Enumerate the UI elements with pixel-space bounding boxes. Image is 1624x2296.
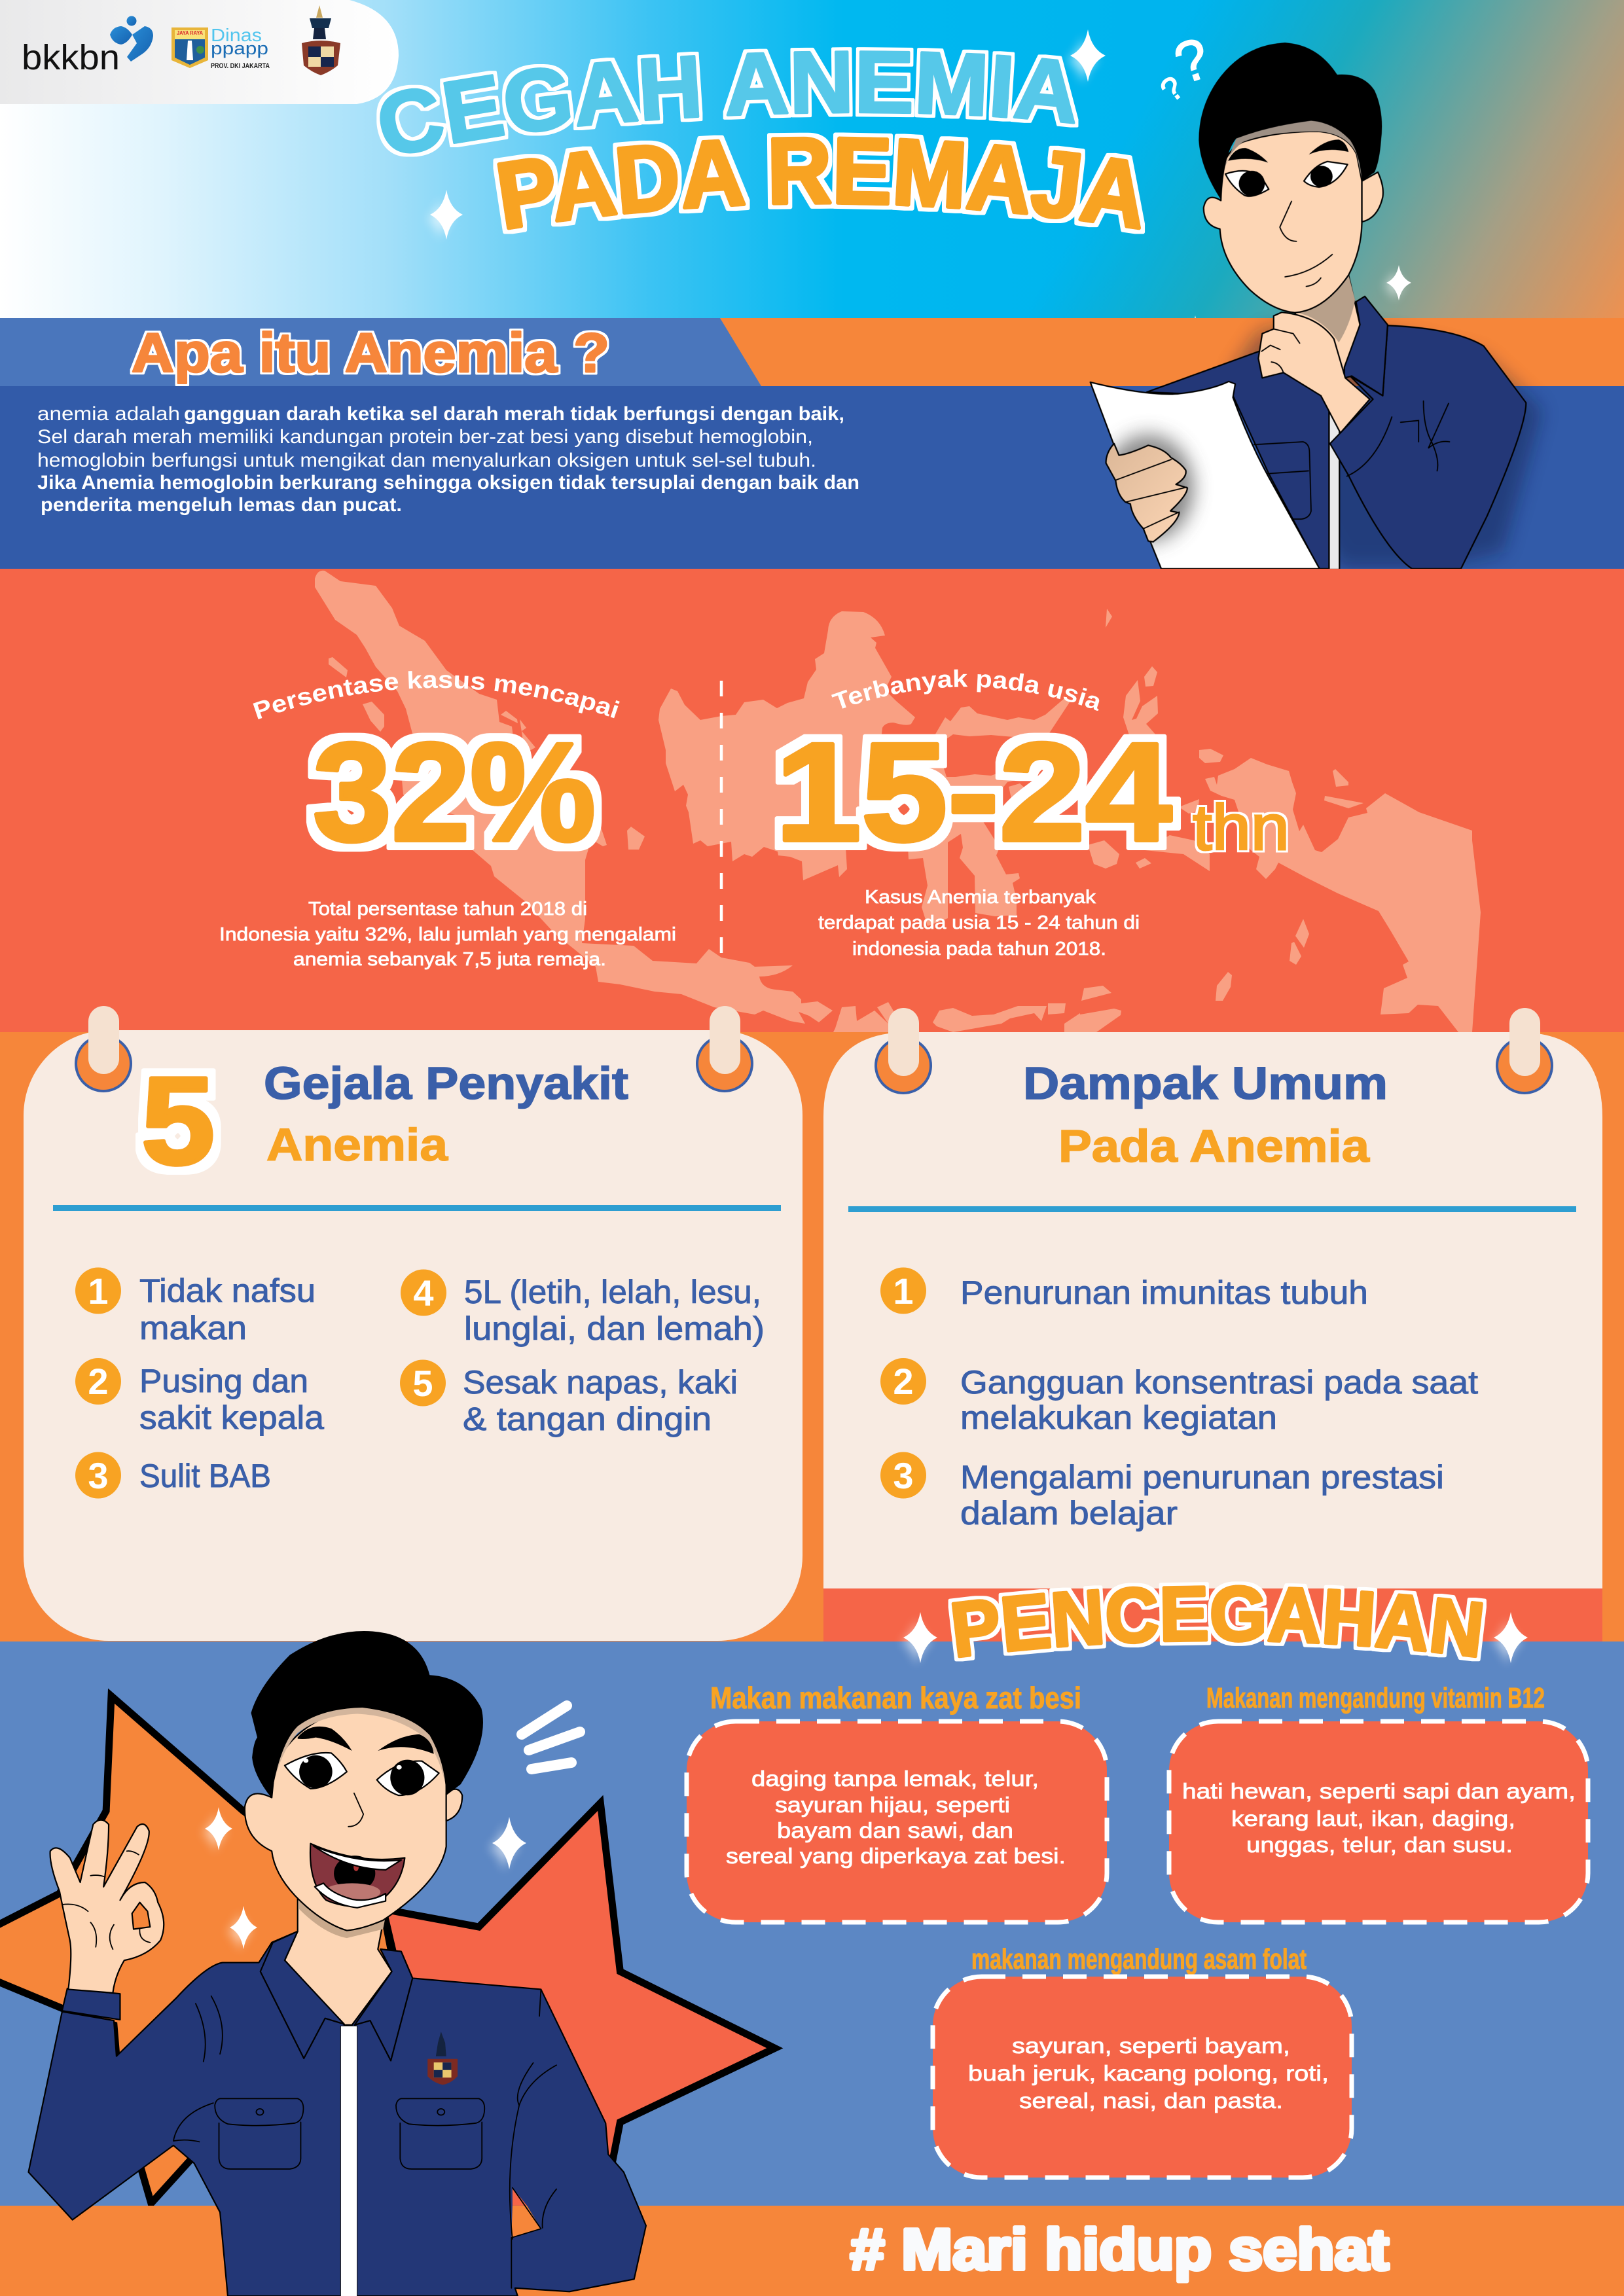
neck — [1295, 275, 1360, 374]
sparkles: around student — [202, 1807, 526, 1951]
panel: vitamin b12: hati hewan, seperti sapi dan ayam, — [1182, 1779, 1576, 1803]
heading: Anemia — [266, 1119, 448, 1170]
text block: definition of anemia: anemia adalah — [37, 403, 180, 425]
logo: bkkbn: bkkbn — [22, 38, 120, 77]
list item 2: Pusing dan — [139, 1363, 308, 1399]
text block: definition of anemia: penderita mengeluh lemas dan pucat. — [41, 494, 402, 516]
panel: gejala penyakit — [24, 1006, 803, 1641]
face — [245, 1704, 446, 1931]
panel: zat besi: sereal yang diperkaya zat besi. — [726, 1844, 1066, 1868]
panel: vitamin b12 — [1169, 1682, 1588, 1922]
text block: age description — [818, 887, 1140, 960]
arm gap — [513, 2188, 527, 2206]
panel: asam folat: buah jeruk, kacang polong, roti, — [968, 2061, 1329, 2085]
panel: zat besi — [687, 1681, 1107, 1922]
eyebrows — [298, 1727, 434, 1754]
text block: definition of anemia: hemoglobin berfungsi untuk mengikat dan menyalurkan oksigen untuk sel-sel tubuh. — [37, 450, 816, 471]
text block: definition of anemia: Sel darah merah memiliki kandungan protein ber-zat besi yang disebut hemoglobin, — [37, 426, 813, 448]
crest badge — [427, 2032, 458, 2085]
illustration: ok-gesture student — [28, 1631, 646, 2296]
text block: definition of anemia — [37, 403, 859, 516]
text block: 32 percent description: Indonesia yaitu 32%, lalu jumlah yang mengalami — [219, 924, 676, 945]
jacket pocket — [1254, 442, 1311, 519]
shirt placket — [340, 2026, 357, 2296]
logo: crest — [302, 5, 340, 75]
big number 5: 5 — [141, 1052, 215, 1191]
cuff — [62, 1988, 120, 2020]
section: prevention background — [0, 1641, 1624, 2206]
heading — [1023, 1058, 1388, 1172]
section: cards background — [0, 1032, 1624, 1643]
eyes — [285, 1753, 347, 1789]
eyebrows — [1228, 139, 1348, 162]
heading — [264, 1058, 628, 1170]
text block: age description: indonesia pada tahun 2018. — [852, 939, 1106, 960]
binder ring left — [76, 1006, 131, 1091]
list item 2: melakukan kegiatan — [960, 1399, 1277, 1436]
panel: vitamin b12: kerang laut, ikan, daging, — [1231, 1806, 1515, 1831]
background star: coral — [383, 1803, 775, 2206]
list item 5 — [400, 1360, 738, 1437]
panel: asam folat: sereal, nasi, dan pasta. — [1019, 2089, 1283, 2113]
icon: excitement lines — [522, 1706, 580, 1769]
panel: zat besi: daging tanpa lemak, telur, — [751, 1767, 1039, 1791]
list item 1 — [880, 1267, 1368, 1314]
nose — [348, 1793, 363, 1827]
list item 2: Gangguan konsentrasi pada saat — [960, 1364, 1478, 1401]
hair shadow — [1221, 120, 1362, 179]
list item 1: Tidak nafsu — [139, 1272, 316, 1309]
illustration: thinking student — [1091, 43, 1542, 569]
text block: age description: Kasus Anemia terbanyak — [865, 887, 1096, 908]
binder ring left — [876, 1008, 931, 1093]
list item 1: Penurunan imunitas tubuh — [960, 1274, 1368, 1311]
logo: bkkbn — [22, 16, 153, 77]
slogan: # Mari hidup sehat — [850, 2217, 1389, 2282]
logo: dinas ppapp: JAYA RAYA — [177, 30, 203, 36]
list item 3 — [880, 1452, 1444, 1532]
list item 2 — [880, 1358, 1478, 1436]
panel: zat besi: bayam dan sawi, dan — [777, 1818, 1013, 1842]
list item 3: Sulit BAB — [139, 1458, 271, 1494]
list item 1 — [75, 1267, 316, 1346]
text block: definition of anemia: Jika Anemia hemoglobin berkurang sehingga oksigen tidak tersuplai dengan baik dan — [37, 472, 859, 493]
hair — [251, 1631, 483, 1798]
heading: terbanyak pada usia: Terbanyak pada usia — [831, 669, 1100, 711]
stat: age 15-24: 15-24 — [775, 714, 1172, 870]
divider: dashed vertical — [720, 681, 723, 966]
eyes — [1225, 171, 1269, 196]
heading: Pada Anemia — [1058, 1121, 1370, 1172]
hero background — [0, 0, 1624, 318]
list item 4: 5L (letih, lelah, lesu, — [464, 1274, 761, 1310]
list item 2: sakit kepala — [139, 1399, 324, 1436]
list item 5: & tangan dingin — [463, 1401, 712, 1437]
paper shadow — [1103, 435, 1194, 541]
text block: 32 percent description: anemia sebanyak 7,5 juta remaja. — [293, 949, 606, 970]
map of Indonesia — [315, 571, 1481, 1032]
shirt creases — [173, 1989, 556, 2239]
list item 2: 2 — [893, 1361, 914, 1402]
panel: asam folat: sayuran, seperti bayam, — [1012, 2034, 1290, 2058]
panel: asam folat: makanan mengandung asam folat — [971, 1943, 1307, 1975]
list item 3 — [75, 1452, 271, 1499]
stat unit: thn: thn — [1193, 791, 1290, 863]
binder ring right — [697, 1006, 752, 1091]
panel: pencegahan header strip — [823, 1588, 1602, 1643]
logo: dinas ppapp: PROV. DKI JAKARTA — [211, 62, 270, 70]
panel: dampak umum — [823, 1008, 1602, 1588]
heading: pencegahan: PENCEGAHAN — [948, 1581, 1487, 1661]
text block: 32 percent description: Total persentase tahun 2018 di — [308, 899, 587, 920]
section: footer band — [0, 2206, 1624, 2296]
logo panel — [0, 0, 399, 104]
hair shadow — [271, 1706, 447, 1793]
face — [1204, 132, 1362, 313]
jacket: collar and arm — [1330, 325, 1526, 569]
collar — [261, 1931, 344, 2058]
shirt strip — [1329, 406, 1339, 569]
stat: 32 percent: 32% — [313, 714, 596, 870]
title: cegah anemia: CEGAH ANEMIA — [376, 47, 1079, 157]
logo: dinas ppapp — [171, 25, 270, 70]
background star: orange — [0, 1696, 409, 2203]
logo: dinas ppapp: Dinas — [211, 25, 262, 45]
list item 2 — [75, 1358, 324, 1436]
panel: asam folat — [933, 1943, 1352, 2178]
question marks: ? — [1153, 69, 1191, 109]
list item 5: Sesak napas, kaki — [463, 1364, 738, 1401]
hand: ok sign — [50, 1820, 164, 1993]
nose and mouth — [1280, 202, 1332, 287]
paper — [1091, 382, 1320, 569]
ear — [446, 1789, 462, 1821]
hair — [1199, 43, 1382, 200]
question marks: ? — [1166, 25, 1217, 96]
hand on paper — [1106, 444, 1187, 542]
heading: persentase kasus mencapai: Persentase kasus mencapai — [253, 671, 620, 719]
list item 1: makan — [139, 1310, 247, 1346]
sparkles: hero — [427, 29, 1411, 344]
text block: 32 percent description — [219, 899, 676, 970]
binder ring right — [1497, 1008, 1552, 1093]
ear — [1362, 172, 1383, 222]
heading: apa itu anemia: Apa itu Anemia ? — [132, 322, 609, 384]
mouth — [310, 1844, 405, 1907]
panel: zat besi: Makan makanan kaya zat besi — [710, 1681, 1081, 1715]
pocket left — [215, 2098, 303, 2169]
neck — [272, 1892, 392, 2025]
hand on chin — [1258, 312, 1370, 433]
list item 1: 1 — [88, 1270, 109, 1312]
heading: Dampak Umum — [1023, 1058, 1388, 1109]
jacket: left — [1147, 351, 1329, 569]
sparkles: pencegahan — [901, 1612, 1528, 1665]
panel: vitamin b12: unggas, telur, dan susu. — [1246, 1833, 1513, 1857]
panel: zat besi: sayuran hijau, seperti — [775, 1793, 1010, 1817]
title: pada remaja: PADA REMAJA — [493, 132, 1146, 234]
list item 4: lunglai, dan lemah) — [464, 1310, 765, 1347]
shadow behind figure — [1230, 325, 1542, 569]
list item 4 — [401, 1270, 765, 1347]
logo: dinas ppapp: ppapp — [211, 39, 268, 58]
pocket right — [396, 2098, 484, 2169]
list item 4: 4 — [413, 1272, 434, 1314]
list item 1: 1 — [893, 1270, 914, 1312]
list item 3: 3 — [88, 1455, 109, 1496]
list item 5: 5 — [412, 1363, 433, 1404]
section: statistics background — [0, 569, 1624, 1033]
text block: age description: terdapat pada usia 15 - 24 tahun di — [818, 912, 1140, 933]
band: apa itu anemia background — [0, 318, 1624, 569]
list item 3: dalam belajar — [960, 1495, 1178, 1532]
text block: definition of anemia: gangguan darah ketika sel darah merah tidak berfungsi dengan baik, — [184, 403, 844, 425]
list item 3: 3 — [893, 1455, 914, 1496]
heading: Gejala Penyakit — [264, 1058, 628, 1109]
list item 2: 2 — [88, 1361, 109, 1402]
question marks — [1153, 25, 1217, 109]
list item 3: Mengalami penurunan prestasi — [960, 1459, 1444, 1496]
shirt — [28, 1931, 646, 2296]
